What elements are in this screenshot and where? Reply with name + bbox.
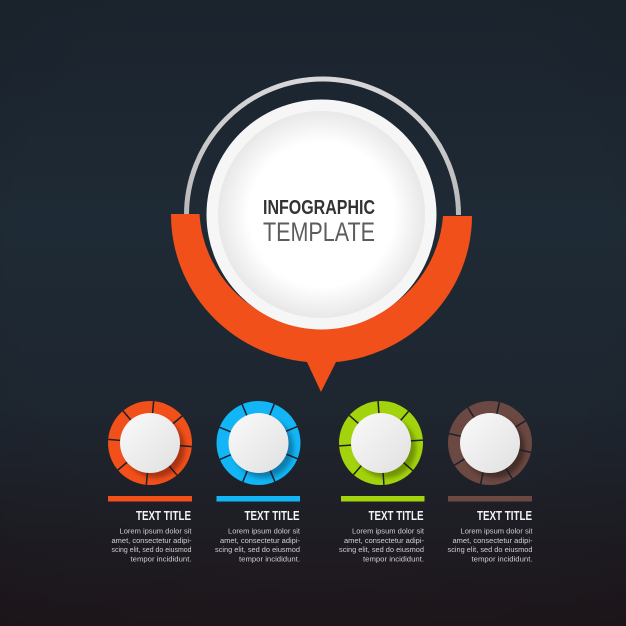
color bar — [341, 496, 424, 502]
item text: tempor incididunt. — [472, 554, 532, 564]
color bar — [216, 496, 300, 502]
item text: Lorem ipsum dolor sit — [352, 526, 425, 536]
item text: Lorem ipsum dolor sit — [120, 526, 192, 536]
item text — [215, 526, 301, 564]
item text: tempor incididunt. — [363, 554, 424, 564]
icon: brown segmented ring — [440, 393, 540, 493]
item title: TEXT TITLE — [244, 508, 300, 523]
icon: green segmented ring — [336, 398, 426, 488]
item text: scing elit, sed do eiusmod — [339, 545, 424, 554]
item 4: brown — [440, 393, 540, 564]
item text: tempor incididunt. — [239, 554, 300, 564]
item 1: orange — [104, 397, 196, 564]
main title — [263, 197, 375, 247]
item text: scing elit, sed do eiusmod — [112, 545, 192, 554]
item text: tempor incididunt. — [130, 554, 192, 564]
color bar — [448, 496, 532, 502]
item text: amet, consectetur adipi- — [220, 536, 300, 545]
item 2: blue — [204, 388, 313, 564]
item text: Lorem ipsum dolor sit — [228, 526, 301, 536]
item 3: green — [336, 398, 426, 564]
item text: amet, consectetur adipi- — [344, 536, 424, 545]
item title: TEXT TITLE — [136, 508, 191, 523]
main title: TEMPLATE — [263, 217, 375, 247]
item text — [339, 526, 425, 564]
icon: blue segmented ring — [204, 388, 313, 498]
item text — [112, 526, 192, 564]
item text: Lorem ipsum dolor sit — [460, 526, 533, 536]
icon: orange segmented ring — [104, 397, 196, 489]
item text: scing elit, sed do eiusmod — [215, 545, 300, 554]
item text — [448, 526, 533, 564]
item text: amet, consectetur adipi- — [452, 536, 533, 545]
item title: TEXT TITLE — [477, 508, 532, 523]
orange pointer ring — [171, 214, 472, 392]
main white circle — [206, 100, 436, 330]
item title: TEXT TITLE — [368, 508, 424, 523]
item text: scing elit, sed do eiusmod — [448, 545, 532, 554]
color bar — [108, 496, 192, 502]
item text: amet, consectetur adipi- — [112, 536, 192, 545]
main title: INFOGRAPHIC — [263, 197, 375, 219]
gray arc above main circle — [186, 79, 458, 215]
